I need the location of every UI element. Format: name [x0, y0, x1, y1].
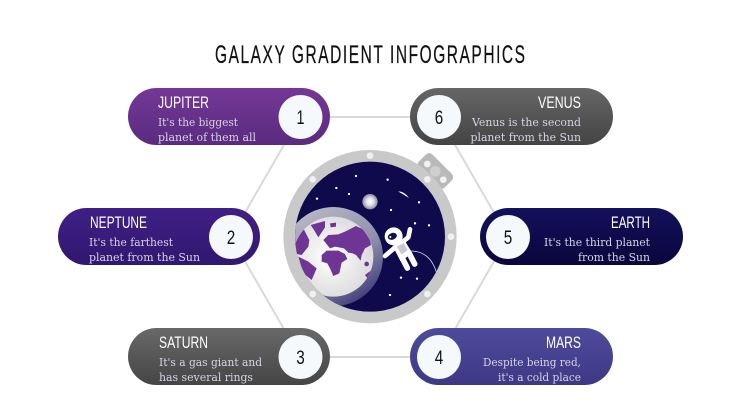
number 3: 3: [296, 347, 305, 369]
text: Jupiter description: planet of them all: [158, 131, 256, 144]
panel: Mars: [410, 328, 613, 385]
text: Mars description: Despite being red,: [483, 356, 581, 369]
icon: porthole ring: [283, 150, 457, 323]
number 5: 5: [504, 227, 512, 249]
heading: Venus: VENUS: [538, 94, 581, 112]
text: Earth description: from the Sun: [578, 251, 650, 264]
icon: glowing star: [362, 194, 378, 209]
number 1: [278, 95, 322, 139]
number 2: [209, 215, 253, 259]
heading: Saturn: SATURN: [159, 334, 208, 352]
text: Earth description: [544, 236, 651, 264]
text: Mars description: it's a cold place: [498, 371, 581, 384]
text: Saturn description: has several rings: [159, 371, 253, 384]
text: Jupiter description: It's the biggest: [158, 116, 239, 129]
number 6: [417, 95, 461, 139]
space scene: [284, 162, 445, 312]
heading: Neptune: NEPTUNE: [90, 214, 147, 232]
panel: Earth: [480, 208, 683, 265]
heading: Mars: MARS: [546, 334, 581, 352]
text: Venus description: planet from the Sun: [470, 131, 581, 144]
icon: astronaut: [385, 227, 415, 268]
number 6: 6: [435, 107, 443, 129]
text: Mars description: [483, 356, 581, 384]
text: Venus description: Venus is the second: [471, 116, 581, 129]
number 4: 4: [435, 347, 443, 369]
heading: Earth: EARTH: [611, 214, 650, 232]
number 1: 1: [296, 107, 304, 129]
stars: [316, 175, 430, 296]
text: Jupiter description: [158, 116, 256, 144]
text: Venus description: [470, 116, 581, 144]
number 2: 2: [227, 227, 235, 249]
heading: Jupiter: JUPITER: [158, 94, 209, 112]
text: Neptune description: It's the farthest: [89, 236, 174, 249]
icon: comet: [398, 191, 409, 198]
icon: tether: [412, 251, 436, 272]
icon: moon planet: [295, 207, 383, 306]
panel: Jupiter: [128, 88, 330, 145]
text: Earth description: It's the third planet: [544, 236, 651, 249]
central porthole illustration: [283, 150, 457, 323]
rivets: [309, 152, 454, 297]
text: Saturn description: [159, 356, 262, 384]
number 4: [417, 335, 461, 379]
text: Saturn description: It's a gas giant and: [159, 356, 262, 369]
icon: porthole hatch: [416, 151, 455, 191]
panel: Venus: [410, 88, 613, 145]
number 3: [278, 335, 322, 379]
text: Neptune description: planet from the Sun: [89, 251, 200, 264]
text: Neptune description: [89, 236, 200, 264]
title: GALAXY GRADIENT INFOGRAPHICS: [215, 41, 525, 69]
number 5: [486, 215, 530, 259]
panel: Saturn: [128, 328, 330, 385]
hexagon connector: [231, 117, 508, 357]
panel: Neptune: [58, 208, 260, 265]
